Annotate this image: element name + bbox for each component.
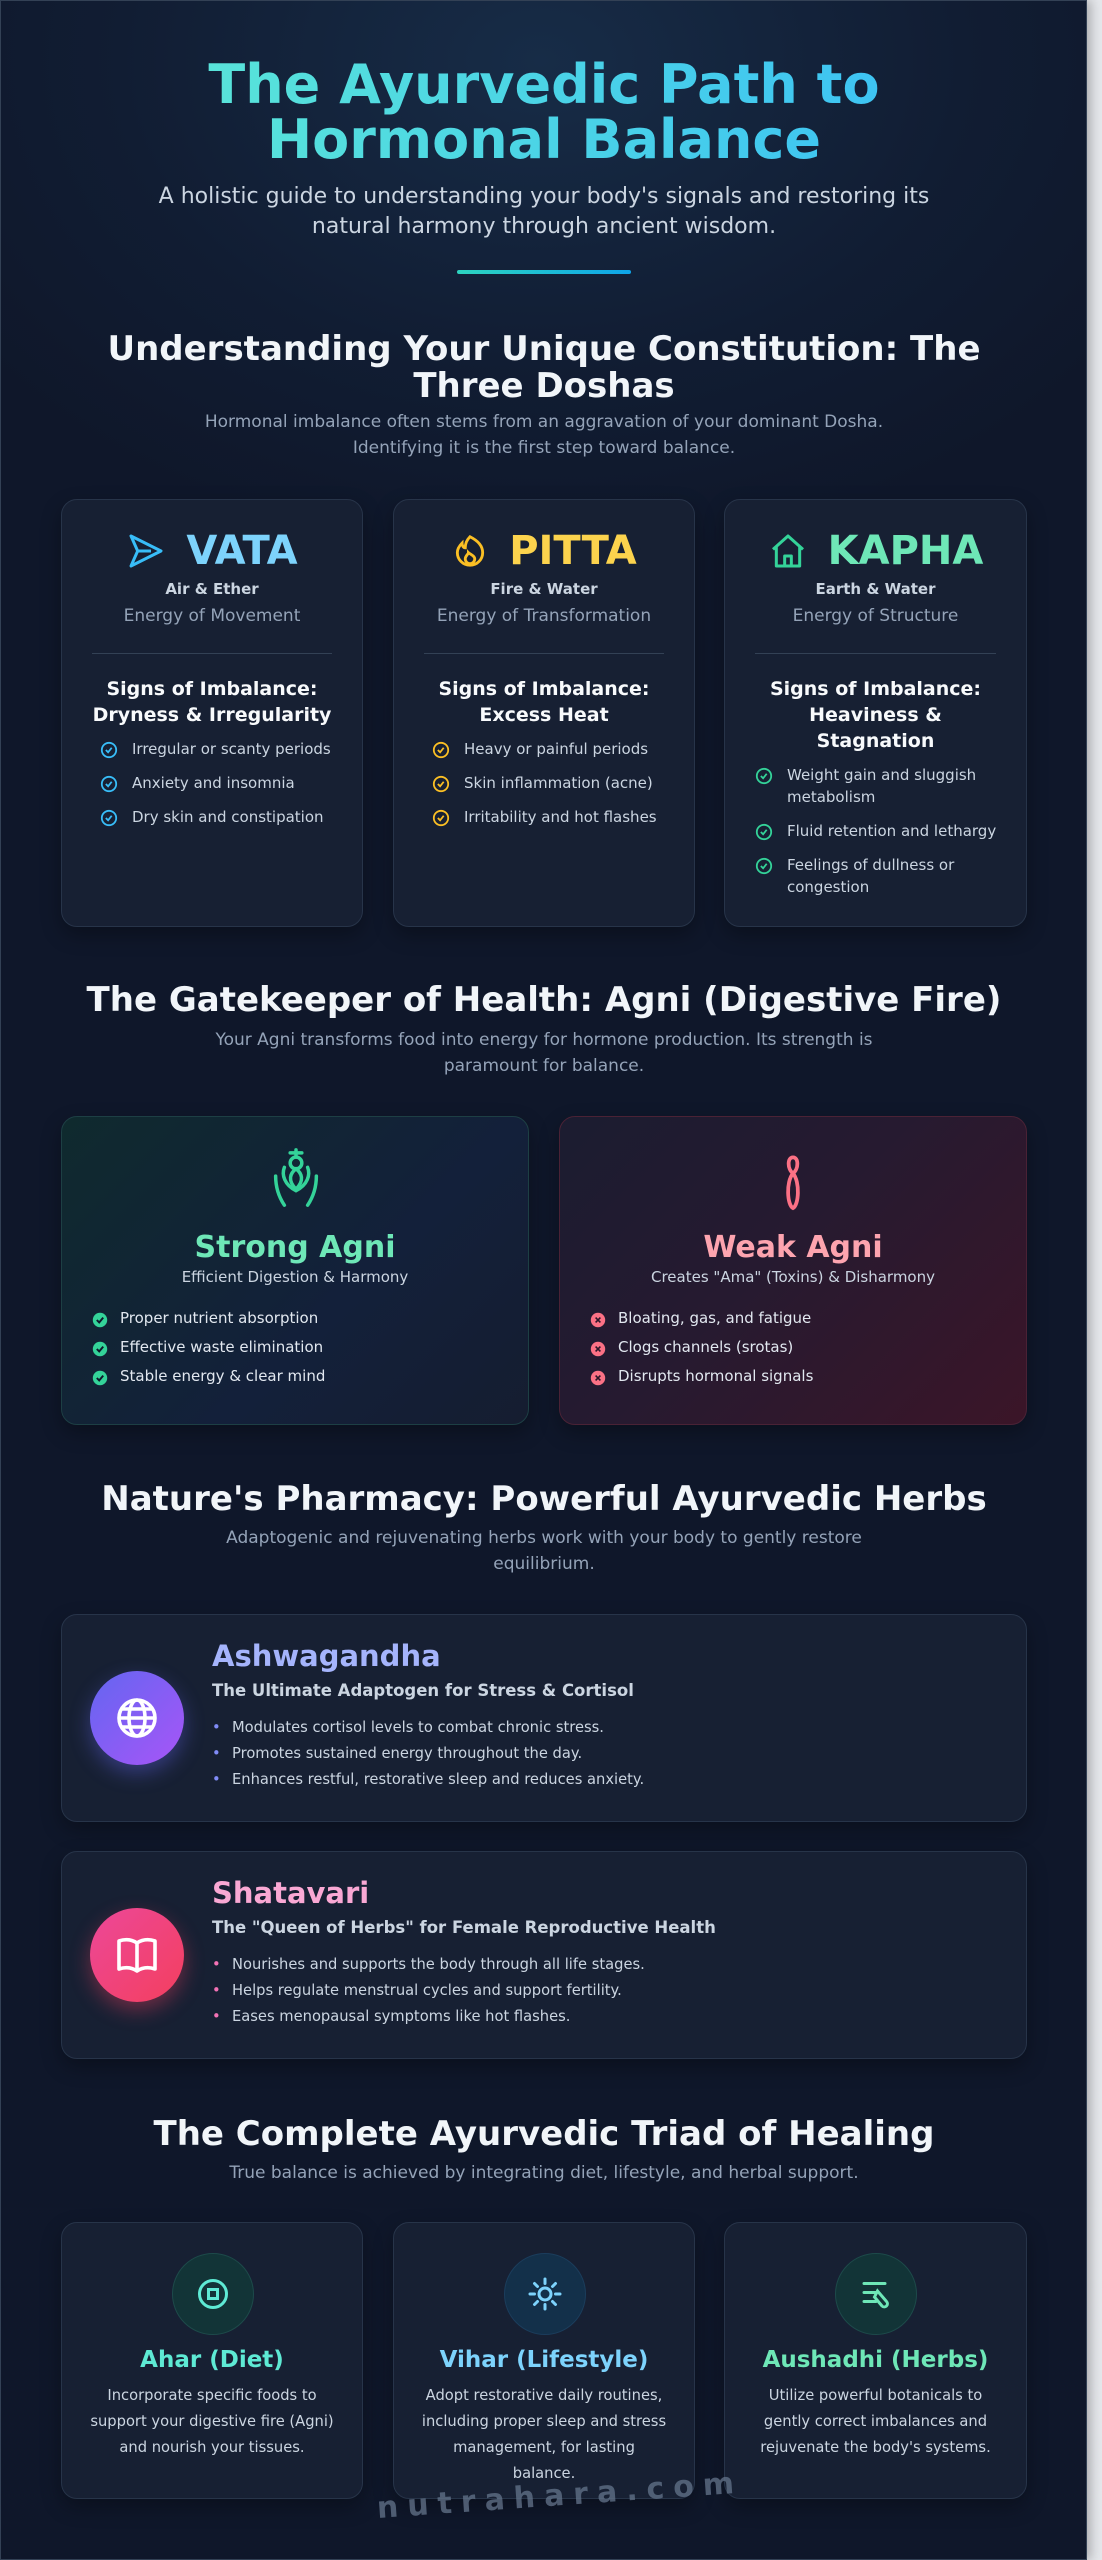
shatavari bullets: Eases menopausal symptoms like hot flashes. bbox=[232, 2008, 570, 2025]
weak agni title: Weak Agni bbox=[703, 1230, 883, 1265]
panel: strong agni: Efficient Digestion & Harmony bbox=[182, 1268, 408, 1286]
vata signs heading bbox=[93, 678, 331, 726]
icon: strong agni bbox=[274, 1148, 318, 1207]
heading: doshas: Understanding Your Unique Constitution: The bbox=[107, 329, 981, 369]
heading: doshas bbox=[107, 329, 981, 406]
herbs intro text: Adaptogenic and rejuvenating herbs work with your body to gently restore equilibrium. bbox=[226, 1528, 862, 1574]
weak agni list bbox=[590, 1309, 813, 1386]
strong agni title: Strong Agni bbox=[195, 1230, 395, 1265]
icon: sun bbox=[504, 2253, 586, 2335]
icon: globe bbox=[90, 1671, 184, 1765]
panel: aushadhi: Utilize powerful botanicals to bbox=[769, 2387, 982, 2404]
ashwagandha bullets: Modulates cortisol levels to combat chronic stress. bbox=[232, 1719, 604, 1736]
panel: vihar bbox=[393, 2222, 695, 2499]
panel: aushadhi: gently correct imbalances and bbox=[764, 2413, 987, 2430]
pitta signs heading bbox=[438, 678, 650, 726]
vata name bbox=[129, 528, 298, 574]
strong agni list bbox=[92, 1309, 325, 1386]
vata list: Dry skin and constipation bbox=[132, 808, 324, 826]
panel: weak agni: Creates "Ama" (Toxins) & Disharmony bbox=[651, 1268, 935, 1286]
panel: ahar: support your digestive fire (Agni) bbox=[90, 2413, 334, 2430]
shatavari name: Shatavari bbox=[212, 1876, 369, 1910]
panel: kapha: Earth & Water bbox=[815, 580, 936, 598]
panel: kapha bbox=[724, 499, 1027, 927]
heading: herbs: Nature's Pharmacy: Powerful Ayurvedic Herbs bbox=[101, 1479, 987, 1519]
shatavari bullets bbox=[214, 1956, 645, 2025]
kapha list: Fluid retention and lethargy bbox=[787, 822, 996, 840]
vata name: VATA bbox=[186, 528, 298, 574]
kapha list: Feelings of dullness or congestion bbox=[787, 856, 954, 896]
vata list: Irregular or scanty periods bbox=[132, 740, 331, 758]
title bbox=[61, 57, 1027, 167]
pitta name: PITTA bbox=[509, 528, 637, 574]
shatavari bullets: Nourishes and supports the body through all life stages. bbox=[232, 1956, 645, 1973]
triad intro text: True balance is achieved by integrating diet, lifestyle, and herbal support. bbox=[229, 2163, 859, 2183]
vata signs heading: Signs of Imbalance: bbox=[106, 678, 318, 700]
vata list bbox=[100, 740, 331, 826]
panel: aushadhi: Aushadhi (Herbs) bbox=[763, 2347, 988, 2373]
panel: ahar: and nourish your tissues. bbox=[119, 2439, 305, 2456]
panel: aushadhi bbox=[724, 2222, 1027, 2499]
shatavari bullets: Helps regulate menstrual cycles and support fertility. bbox=[232, 1982, 622, 1999]
pitta signs heading: Excess Heat bbox=[479, 704, 609, 726]
panel: shatavari bbox=[61, 1851, 1027, 2059]
panel: ahar: Incorporate specific foods to bbox=[107, 2387, 317, 2404]
kapha signs heading: Stagnation bbox=[817, 730, 934, 752]
heading: triad: The Complete Ayurvedic Triad of Healing bbox=[154, 2114, 934, 2154]
panel: vihar: including proper sleep and stress bbox=[422, 2413, 666, 2430]
panel: weak agni bbox=[559, 1116, 1027, 1425]
kapha list: Weight gain and sluggish metabolism bbox=[787, 766, 976, 806]
panel: vihar: management, for lasting bbox=[453, 2439, 635, 2456]
kapha name: KAPHA bbox=[828, 528, 983, 574]
kapha signs heading bbox=[770, 678, 981, 752]
weak agni list: Bloating, gas, and fatigue bbox=[618, 1309, 811, 1327]
vata list: Anxiety and insomnia bbox=[132, 774, 295, 792]
panel: ashwagandha: The Ultimate Adaptogen for Stress & Cortisol bbox=[212, 1681, 634, 1700]
agni intro text: Your Agni transforms food into energy for hormone production. Its strength is paramount for balance. bbox=[215, 1030, 873, 1076]
ashwagandha bullets bbox=[214, 1719, 644, 1788]
panel: ahar bbox=[61, 2222, 363, 2499]
heading: doshas: Three Doshas bbox=[413, 366, 675, 406]
panel: vihar: Adopt restorative daily routines, bbox=[426, 2387, 662, 2404]
panel: vata: Air & Ether bbox=[165, 580, 259, 598]
panel: pitta bbox=[393, 499, 695, 927]
weak agni list: Disrupts hormonal signals bbox=[618, 1367, 813, 1385]
title: The Ayurvedic Path to bbox=[208, 53, 880, 116]
icon: herbs bbox=[835, 2253, 917, 2335]
panel: vata bbox=[61, 499, 363, 927]
panel: shatavari: The "Queen of Herbs" for Female Reproductive Health bbox=[212, 1918, 716, 1937]
heading: agni: The Gatekeeper of Health: Agni (Digestive Fire) bbox=[87, 980, 1001, 1020]
watermark: nutrahara.com bbox=[376, 2465, 744, 2526]
panel: pitta: Energy of Transformation bbox=[437, 606, 651, 626]
weak agni list: Clogs channels (srotas) bbox=[618, 1338, 793, 1356]
pitta list: Heavy or painful periods bbox=[464, 740, 648, 758]
icon: book bbox=[90, 1908, 184, 2002]
strong agni list: Stable energy & clear mind bbox=[120, 1367, 325, 1385]
panel: ahar: Ahar (Diet) bbox=[140, 2347, 284, 2373]
ashwagandha bullets: Enhances restful, restorative sleep and reduces anxiety. bbox=[232, 1771, 644, 1788]
ashwagandha bullets: Promotes sustained energy throughout the day. bbox=[232, 1745, 582, 1762]
panel: vata: Energy of Movement bbox=[124, 606, 300, 626]
strong agni list: Effective waste elimination bbox=[120, 1338, 323, 1356]
doshas intro text: Hormonal imbalance often stems from an aggravation of your dominant Dosha. Identifying it is the first step toward balance. bbox=[205, 412, 883, 458]
kapha signs heading: Heaviness & bbox=[809, 704, 942, 726]
pitta list bbox=[432, 740, 657, 826]
pitta list: Skin inflammation (acne) bbox=[464, 774, 653, 792]
panel: kapha: Energy of Structure bbox=[793, 606, 958, 626]
subtitle: A holistic guide to understanding your body's signals and restoring its natural harmony through ancient wisdom. bbox=[159, 184, 929, 239]
icon: diet bbox=[172, 2253, 254, 2335]
panel: aushadhi: rejuvenate the body's systems. bbox=[760, 2439, 991, 2456]
panel: pitta: Fire & Water bbox=[490, 580, 598, 598]
panel: vihar: Vihar (Lifestyle) bbox=[440, 2347, 648, 2373]
panel: strong agni bbox=[61, 1116, 529, 1425]
pitta list: Irritability and hot flashes bbox=[464, 808, 657, 826]
strong agni list: Proper nutrient absorption bbox=[120, 1309, 318, 1327]
panel: ashwagandha bbox=[61, 1614, 1027, 1822]
kapha list bbox=[756, 766, 996, 896]
title: Hormonal Balance bbox=[267, 108, 821, 171]
pitta signs heading: Signs of Imbalance: bbox=[438, 678, 650, 700]
kapha signs heading: Signs of Imbalance: bbox=[770, 678, 981, 700]
ashwagandha name: Ashwagandha bbox=[212, 1639, 441, 1673]
panel: vihar: balance. bbox=[513, 2465, 575, 2482]
vata signs heading: Dryness & Irregularity bbox=[93, 704, 331, 726]
icon: weak agni bbox=[786, 1156, 800, 1210]
